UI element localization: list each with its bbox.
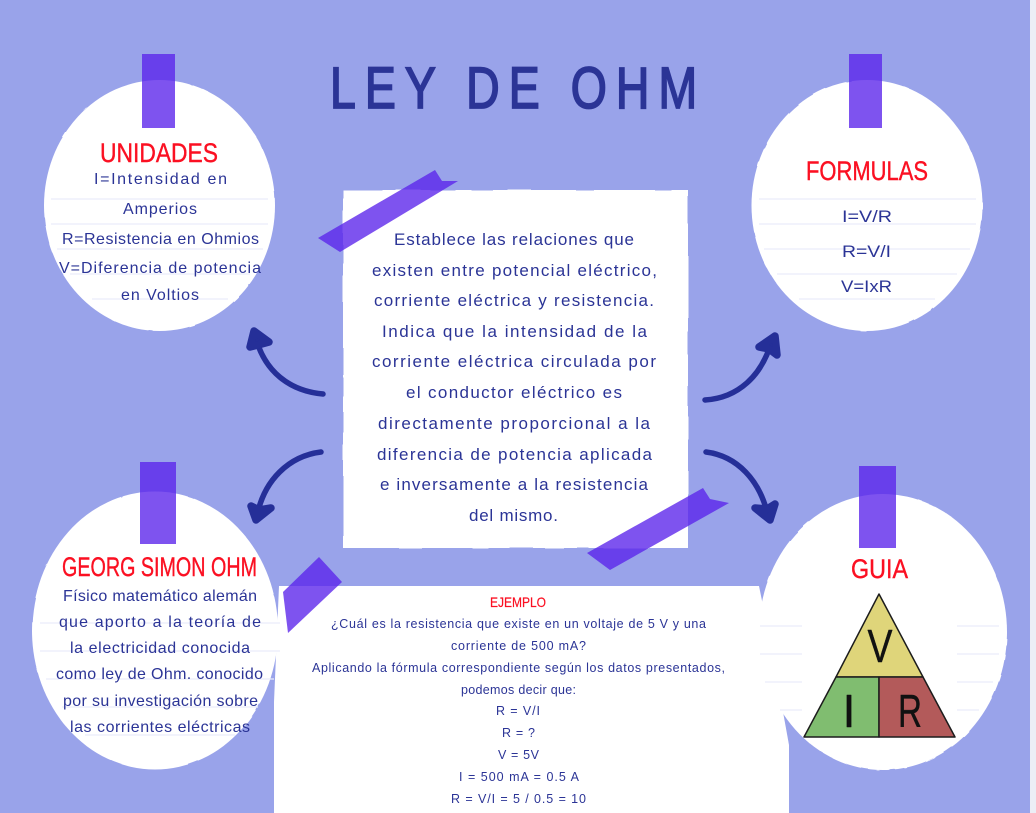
- tape: ejemplo: [283, 557, 342, 633]
- text: georg: [56, 588, 263, 736]
- text: ejemplo: I = 500 mA = 0.5 A: [459, 770, 580, 784]
- text: ejemplo: R = ?: [502, 726, 535, 740]
- heading: unidades: UNIDADES: [100, 138, 218, 168]
- text: georg: las corrientes eléctricas: [70, 719, 250, 736]
- tape: guia: [859, 466, 896, 548]
- panel: georg simon ohm: [32, 492, 278, 770]
- text: georg: que aporto a la teoría de: [59, 614, 261, 631]
- tape: top of definition: [318, 170, 458, 252]
- ruled lines: georg: [40, 623, 280, 735]
- text: unidades: I=Intensidad en: [94, 171, 227, 188]
- icon: ohm triangle: R: [898, 685, 922, 737]
- text: ejemplo: [312, 594, 725, 806]
- arrow: to formulas: [705, 336, 777, 400]
- text: definition: corriente eléctrica circulada por: [372, 352, 656, 371]
- text: unidades: Amperios: [123, 201, 197, 218]
- text: unidades: en Voltios: [121, 287, 199, 304]
- heading: georg: GEORG SIMON OHM: [62, 552, 257, 582]
- text: definition: [372, 230, 657, 525]
- panel: unidades: [44, 54, 275, 331]
- icon: ohm triangle: V: [868, 620, 893, 672]
- text: definition: Indica que la intensidad de la: [382, 322, 648, 341]
- ruled lines: guia: [760, 626, 999, 710]
- text: definition: existen entre potencial eléctrico,: [372, 261, 657, 280]
- panel: guia: [759, 494, 1007, 770]
- text: definition: diferencia de potencia aplicada: [377, 445, 653, 464]
- icon: ohm triangle: [804, 594, 955, 737]
- text: ejemplo: Aplicando la fórmula correspondiente según los datos presentados,: [312, 661, 725, 675]
- text: georg: como ley de Ohm. conocido: [56, 666, 263, 683]
- text: definition: Establece las relaciones que: [394, 230, 634, 249]
- text: formulas: [841, 207, 892, 296]
- text: definition: del mismo.: [469, 506, 558, 525]
- text: ejemplo: corriente de 500 mA?: [451, 639, 586, 653]
- text: definition: directamente proporcional a la: [378, 414, 651, 433]
- tape: unidades: [142, 54, 175, 128]
- text: unidades: R=Resistencia en Ohmios: [62, 231, 259, 248]
- text: unidades: [59, 171, 261, 304]
- arrow: to unidades: [250, 331, 323, 394]
- text: ejemplo: V = 5V: [498, 748, 540, 762]
- arrow: to georg: [251, 452, 321, 520]
- panel: formulas: [752, 54, 982, 331]
- text: definition: corriente eléctrica y resistencia.: [374, 291, 654, 310]
- text: ejemplo: R = V/I = 5 / 0.5 = 10: [451, 792, 586, 806]
- text: definition: el conductor eléctrico es: [406, 383, 622, 402]
- arrow: to guia: [706, 452, 775, 520]
- title: LEY DE OHM: [330, 56, 697, 121]
- heading: formulas: FORMULAS: [806, 156, 928, 186]
- tape: formulas: [849, 54, 882, 128]
- panel: ejemplo: [274, 586, 789, 813]
- text: formulas: I=V/R: [842, 207, 892, 226]
- heading: guia: GUIA: [851, 554, 908, 584]
- text: georg: Físico matemático alemán: [63, 588, 257, 605]
- text: unidades: V=Diferencia de potencia: [59, 260, 261, 277]
- text: formulas: V=IxR: [841, 277, 892, 296]
- panel: definition: [343, 190, 688, 548]
- text: definition: e inversamente a la resistencia: [380, 475, 649, 494]
- tape: bottom of definition: [587, 488, 729, 570]
- text: formulas: R=V/I: [842, 242, 891, 261]
- text: ejemplo: ¿Cuál es la resistencia que existe en un voltaje de 5 V y una: [331, 617, 706, 631]
- text: georg: por su investigación sobre: [63, 693, 258, 710]
- text: georg: la electricidad conocida: [70, 640, 250, 657]
- tape: georg: [140, 462, 176, 544]
- text: ejemplo: R = V/I: [496, 704, 540, 718]
- heading: ejemplo: EJEMPLO: [490, 594, 546, 610]
- text: ejemplo: podemos decir que:: [461, 683, 576, 697]
- icon: ohm triangle: I: [843, 685, 855, 737]
